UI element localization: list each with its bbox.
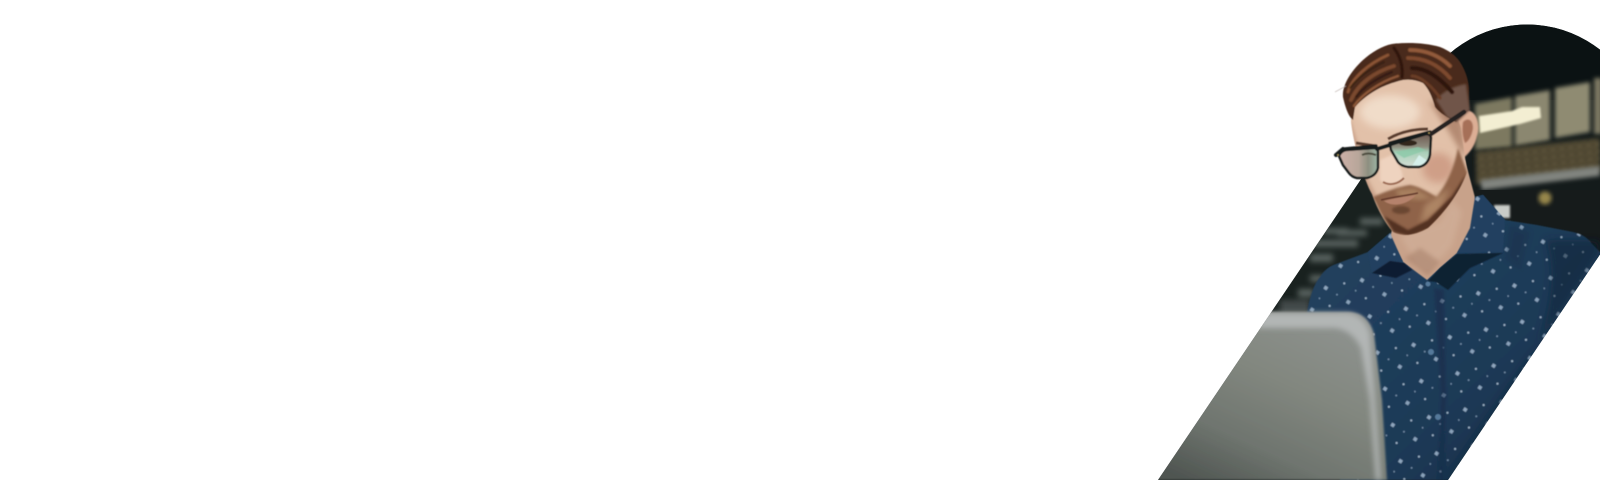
hair shaved side [1436, 84, 1470, 122]
shirt placket [1434, 288, 1446, 480]
laptop lid [1150, 312, 1387, 480]
frame rivets [1337, 154, 1339, 156]
photo: man with glasses at a laptop in a domed parallelogram [1158, 24, 1600, 480]
left lens [1339, 148, 1378, 178]
lens reflections [1412, 155, 1429, 166]
face [1350, 79, 1468, 236]
glasses [1336, 112, 1464, 178]
lower lip [1384, 195, 1416, 205]
shirt buttons [1425, 281, 1442, 420]
balcony with sparkling lights [1476, 138, 1600, 190]
ear [1457, 110, 1478, 158]
neck shadow [1405, 248, 1440, 276]
head [1335, 43, 1480, 245]
round lamp [1538, 192, 1552, 204]
dark background fill [1150, 20, 1600, 480]
beard dark lower edge [1384, 174, 1466, 236]
chalkboard with smudged text [1270, 179, 1386, 314]
nose [1380, 154, 1403, 184]
shirt shadow folds [1448, 240, 1600, 480]
neck [1390, 160, 1478, 280]
frames [1336, 112, 1464, 178]
mouth [1381, 193, 1418, 200]
chin patch [1392, 206, 1410, 214]
shirt collar [1368, 195, 1505, 290]
laptop top edge highlight [1256, 313, 1381, 480]
stray hair [1335, 86, 1346, 92]
temple shadow [1428, 100, 1466, 160]
lit windows [1475, 78, 1600, 150]
building top dark band [1450, 24, 1600, 100]
clipped background and torso [1150, 20, 1600, 480]
hair highlights [1348, 48, 1452, 106]
right lens [1390, 134, 1431, 167]
lower dark storefront [1476, 190, 1600, 260]
eyebrows [1356, 129, 1428, 146]
eye behind lens [1399, 140, 1417, 146]
shirt torso [1307, 195, 1600, 480]
white sign behind collar [1494, 205, 1510, 218]
cheek tone [1422, 153, 1454, 183]
beard light patches [1395, 188, 1432, 200]
beard [1373, 148, 1468, 237]
ceiling light [1479, 107, 1541, 133]
neck highlight [1400, 200, 1462, 270]
left face shade [1351, 122, 1376, 198]
hair [1335, 43, 1470, 122]
forehead highlight [1360, 95, 1420, 129]
